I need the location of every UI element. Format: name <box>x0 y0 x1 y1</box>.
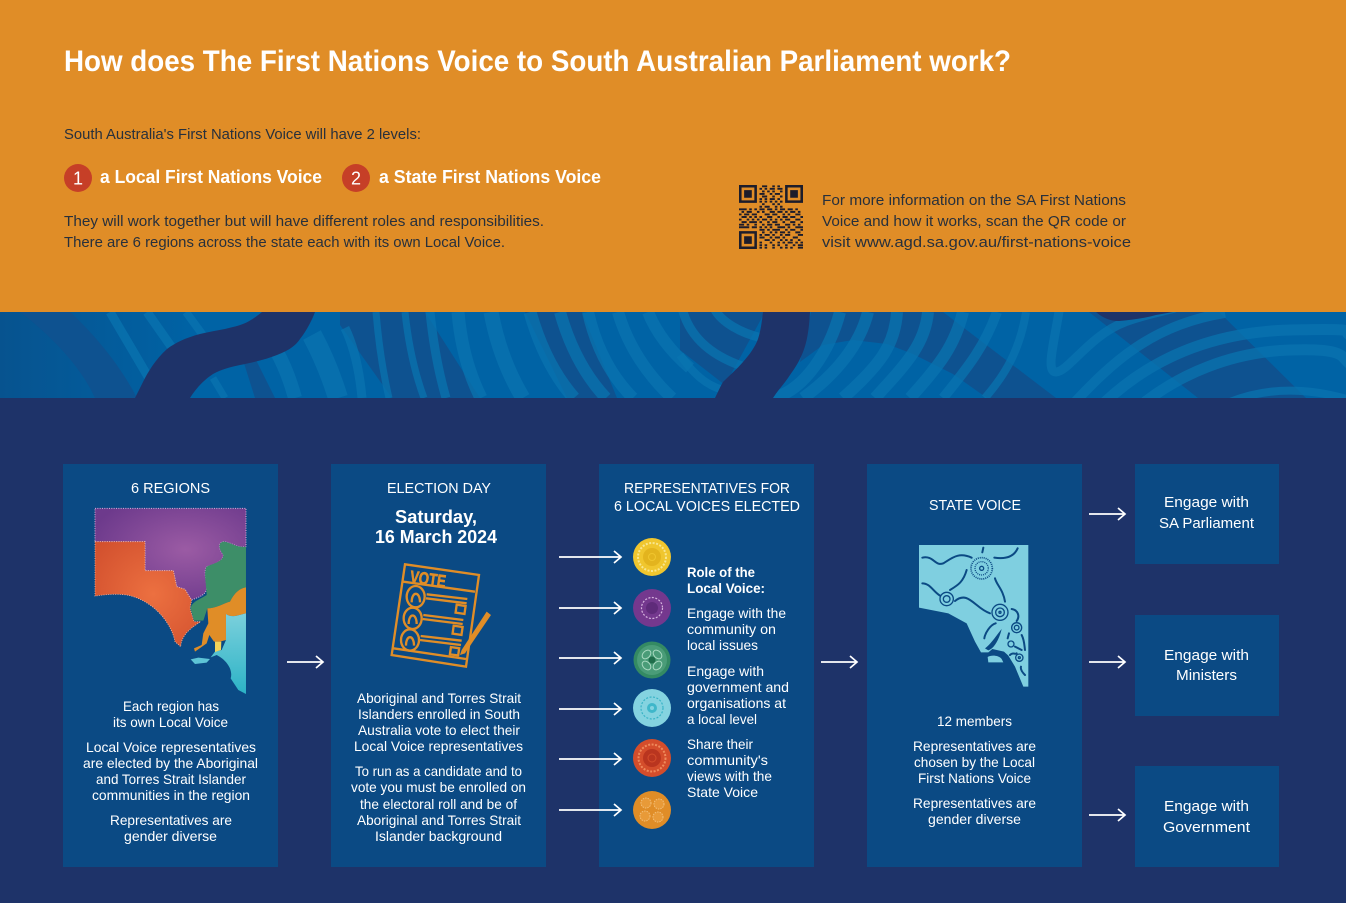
text: election description: Aboriginal and Torres Strait <box>357 690 521 706</box>
text: role of the local voice: community on <box>687 621 776 637</box>
icon: light blue region circle <box>633 689 671 727</box>
text: state voice description: Representatives are <box>913 738 1036 754</box>
box: engage with SA Parliament: SA Parliament <box>1159 515 1255 532</box>
heading: 6 regions: 6 REGIONS <box>131 480 210 497</box>
text: state voice description <box>913 713 1036 827</box>
election date: 16 March 2024 <box>375 527 497 547</box>
election date: Saturday, <box>395 507 477 527</box>
decorative patterned band <box>0 312 1346 398</box>
heading: state voice: STATE VOICE <box>929 497 1021 514</box>
navy lower background <box>0 398 1346 903</box>
text: role of the local voice: Engage with <box>687 663 764 679</box>
text: role of the local voice: local issues <box>687 637 758 653</box>
panel: election day <box>331 464 546 867</box>
map: South Australia with dot art <box>919 545 1028 687</box>
text: role of the local voice: Local Voice: <box>687 581 765 596</box>
text: regions description: Local Voice representatives <box>86 739 256 755</box>
box: engage with Ministers: Engage with <box>1164 647 1249 664</box>
icon: green region circle <box>634 642 670 678</box>
arrow: state voice to government <box>1089 809 1125 821</box>
text: election description: Aboriginal and Torres Strait <box>357 812 521 828</box>
level 1 badge and label: a Local First Nations Voice <box>100 167 322 187</box>
box: engage with SA Parliament <box>1135 464 1279 564</box>
QR information text: For more information on the SA First Nations <box>822 192 1126 209</box>
box: engage with SA Parliament: Engage with <box>1164 494 1249 511</box>
text: regions description: Each region has <box>123 698 219 714</box>
level 1 badge and label <box>64 164 322 192</box>
panel: 6 regions <box>63 464 278 867</box>
text: regions description: Representatives are <box>110 812 232 828</box>
text: role of the local voice: government and <box>687 679 789 695</box>
text: role of the local voice: views with the <box>687 768 772 784</box>
arrow: state voice to parliament <box>1089 508 1125 520</box>
map: six regions of South Australia <box>95 508 246 694</box>
text: state voice description: chosen by the Local <box>914 754 1035 770</box>
text: election description: Islanders enrolled in South <box>358 706 520 722</box>
icon: ballot paper and pencil <box>392 564 491 667</box>
text: election description: the electoral roll and be of <box>360 796 517 812</box>
text: election description: Local Voice representatives <box>354 738 523 754</box>
level 1 badge and label: 1 <box>73 168 83 188</box>
text: role of the local voice: State Voice <box>687 784 758 800</box>
text: role of the local voice: a local level <box>687 711 757 727</box>
title: How does The First Nations Voice to South Australian Parliament work? <box>64 45 1011 78</box>
heading: election day: ELECTION DAY <box>387 480 491 497</box>
box: engage with Government: Engage with <box>1164 798 1249 815</box>
arrows: election to six local voices <box>559 551 621 816</box>
text: election description: vote you must be enrolled on <box>351 779 526 795</box>
QR code <box>739 185 803 249</box>
text: regions description: communities in the region <box>92 787 250 803</box>
box: engage with Ministers: Ministers <box>1176 667 1237 684</box>
text: regions description: gender diverse <box>124 828 217 844</box>
text: regions description: are elected by the Aboriginal <box>83 755 258 771</box>
text: role of the local voice: Share their <box>687 736 753 752</box>
heading: representatives <box>614 480 800 515</box>
heading: representatives: REPRESENTATIVES FOR <box>624 480 790 497</box>
level 2 badge and label <box>342 164 601 192</box>
icon: ballot paper and pencil: VOTE <box>409 566 447 591</box>
arrow: state voice to ministers <box>1089 656 1125 668</box>
icon: purple region circle <box>633 589 671 627</box>
text: role of the local voice <box>687 565 789 800</box>
QR information text: Voice and how it works, scan the QR code or <box>822 213 1126 230</box>
text: state voice description: First Nations Voice <box>918 770 1031 786</box>
description text <box>64 213 544 251</box>
arrow: regions to election <box>287 656 323 668</box>
text: role of the local voice: Engage with the <box>687 605 786 621</box>
text: regions description: and Torres Strait Islander <box>96 771 246 787</box>
intro text: South Australia's First Nations Voice will have 2 levels: <box>64 126 421 143</box>
icon: yellow region circle <box>633 538 671 576</box>
heading: representatives: 6 LOCAL VOICES ELECTED <box>614 498 800 515</box>
description text: There are 6 regions across the state each with its own Local Voice. <box>64 234 505 251</box>
QR information text: visit www.agd.sa.gov.au/first-nations-voice <box>822 234 1131 251</box>
level 2 badge and label: 2 <box>351 168 361 188</box>
text: regions description: its own Local Voice <box>113 714 228 730</box>
text: role of the local voice: organisations at <box>687 695 786 711</box>
box: engage with Government <box>1135 766 1279 867</box>
text: state voice description: Representatives are <box>913 795 1036 811</box>
icon: orange region circle <box>633 791 671 829</box>
text: election description: To run as a candidate and to <box>355 763 522 779</box>
level 2 badge and label: a State First Nations Voice <box>379 167 601 187</box>
text: role of the local voice: Role of the <box>687 565 755 580</box>
box: engage with Ministers <box>1135 615 1279 716</box>
arrow: local voices to state voice <box>821 656 857 668</box>
box: engage with Government: Government <box>1163 819 1251 836</box>
text: state voice description: 12 members <box>937 713 1012 729</box>
QR information text <box>822 192 1131 251</box>
panel: representatives <box>599 464 814 867</box>
orange header panel <box>0 0 1346 312</box>
election date <box>375 507 497 547</box>
text: election description: Australia vote to elect their <box>358 722 520 738</box>
text: state voice description: gender diverse <box>928 811 1021 827</box>
icon: red region circle <box>633 739 671 777</box>
text: election description <box>351 690 526 844</box>
text: election description: Islander background <box>375 828 502 844</box>
description text: They will work together but will have different roles and responsibilities. <box>64 213 544 230</box>
text: role of the local voice: community's <box>687 752 768 768</box>
text: regions description <box>83 698 258 844</box>
panel: state voice <box>867 464 1082 867</box>
